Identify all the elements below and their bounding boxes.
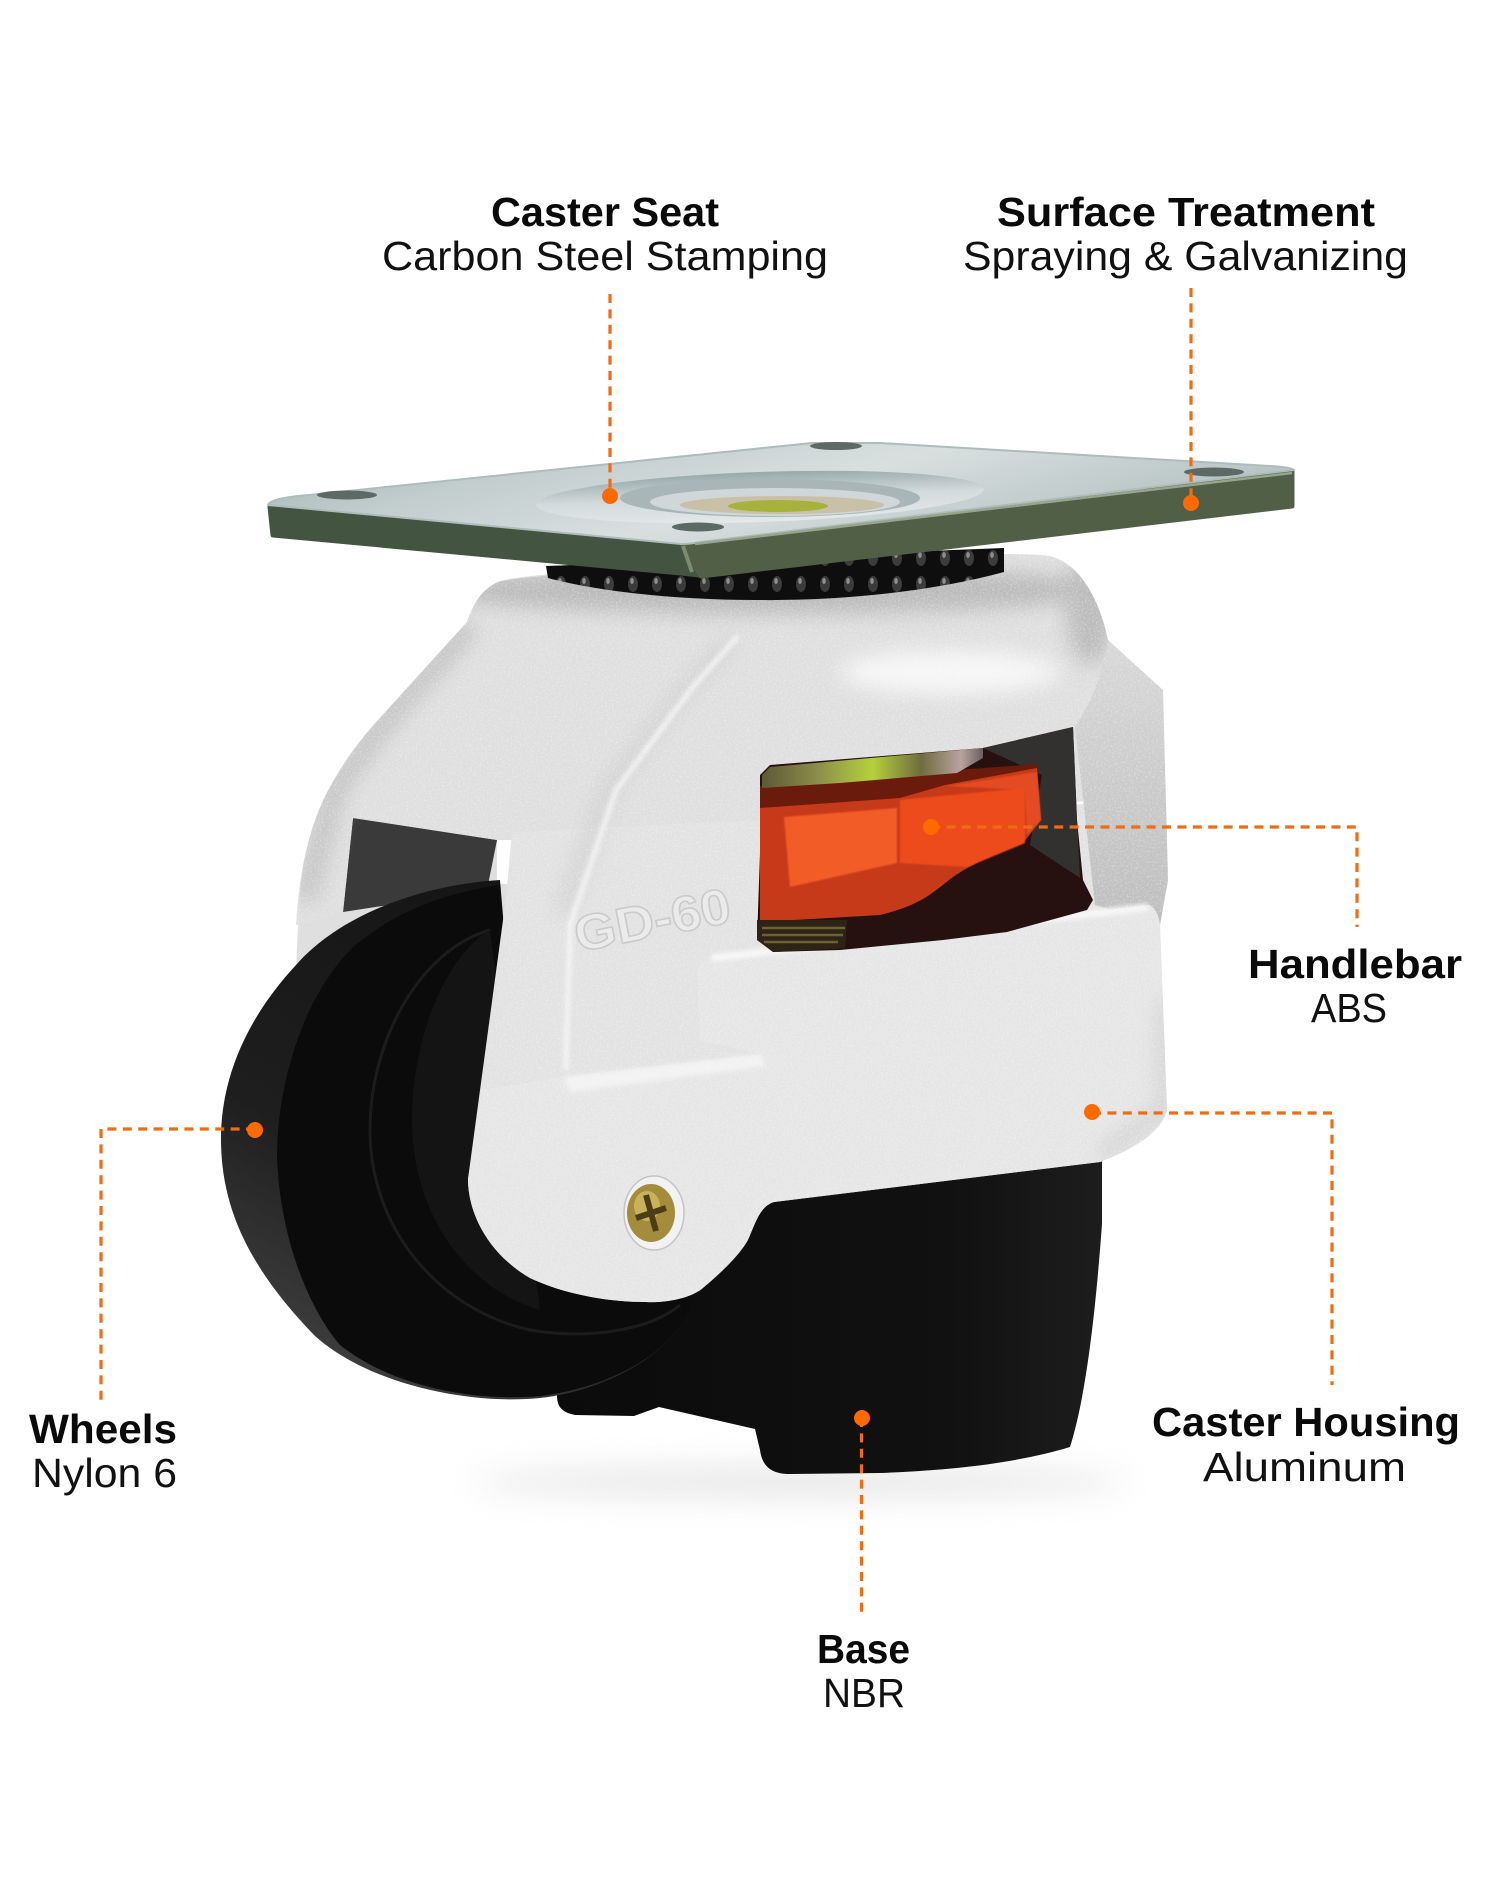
base	[557, 1150, 1102, 1474]
material: abs: ABS	[1311, 985, 1387, 1031]
plate corner highlight	[683, 546, 692, 572]
plate left edge	[270, 507, 699, 575]
rear window slot	[497, 840, 513, 884]
dark upper band	[760, 764, 1037, 815]
soft shading on upper housing	[305, 555, 1114, 915]
axle screw	[624, 1176, 684, 1250]
lower housing band	[468, 905, 1167, 1302]
callout: base	[817, 1410, 910, 1716]
mounting plate	[268, 442, 1294, 576]
orange handle body	[760, 768, 1041, 922]
model mark: GD-60	[569, 878, 735, 963]
housing side panel	[1075, 640, 1168, 925]
upper housing	[296, 554, 1108, 925]
plate edge highlight	[695, 473, 1292, 544]
plate inner dome	[620, 479, 920, 517]
plate dome	[535, 464, 985, 530]
material: nylon 6: Nylon 6	[32, 1450, 177, 1496]
heading: surface treatment: Surface Treatment	[997, 189, 1375, 235]
body back silhouette	[296, 565, 760, 1000]
housing speckle texture	[290, 550, 1180, 1310]
cap highlight	[840, 650, 1060, 694]
material: spraying and galvanizing: Spraying & Galvanizing	[963, 233, 1408, 279]
band highlight	[712, 907, 1148, 958]
mounting holes	[317, 442, 1244, 532]
shadow beneath bearing	[430, 566, 1110, 614]
orange upper block	[947, 772, 1041, 835]
plate top face	[268, 443, 1294, 544]
heading: caster seat: Caster Seat	[491, 189, 719, 235]
orange handle block left	[784, 808, 897, 887]
mechanism window	[757, 727, 1093, 952]
body front	[468, 800, 1168, 1302]
heading: caster housing: Caster Housing	[1152, 1399, 1460, 1445]
callout: wheels	[29, 1122, 263, 1496]
inner wall	[983, 727, 1080, 878]
left edge shade	[305, 625, 470, 900]
heading: wheels: Wheels	[29, 1406, 177, 1452]
band lower shade	[1100, 1000, 1165, 1155]
washer	[762, 748, 983, 788]
wheel	[221, 880, 692, 1399]
material: aluminum: Aluminum	[1203, 1444, 1406, 1490]
housing ridge	[566, 636, 738, 1070]
plate hub	[680, 496, 884, 514]
window opening	[757, 727, 1093, 952]
rear window	[343, 818, 497, 912]
arm highlight	[564, 1054, 765, 1092]
ridge shade	[562, 670, 699, 906]
threaded bolt	[757, 920, 847, 952]
orange handle block right	[900, 788, 1025, 867]
material: carbon steel stamping: Carbon Steel Stamping	[382, 233, 828, 279]
callout: caster seat	[382, 189, 828, 504]
callout: caster housing	[1084, 1104, 1460, 1490]
material: nbr: NBR	[823, 1670, 905, 1716]
caster product illustration	[221, 442, 1294, 1498]
bearing ring	[546, 548, 1004, 600]
callout: handlebar	[923, 819, 1462, 1031]
right cap shade	[1066, 555, 1114, 665]
plate right edge	[683, 471, 1292, 576]
heading: base: Base	[817, 1626, 910, 1672]
callout: surface treatment	[963, 189, 1408, 511]
heading: handlebar: Handlebar	[1248, 941, 1462, 987]
ground shadow	[470, 1466, 1130, 1498]
